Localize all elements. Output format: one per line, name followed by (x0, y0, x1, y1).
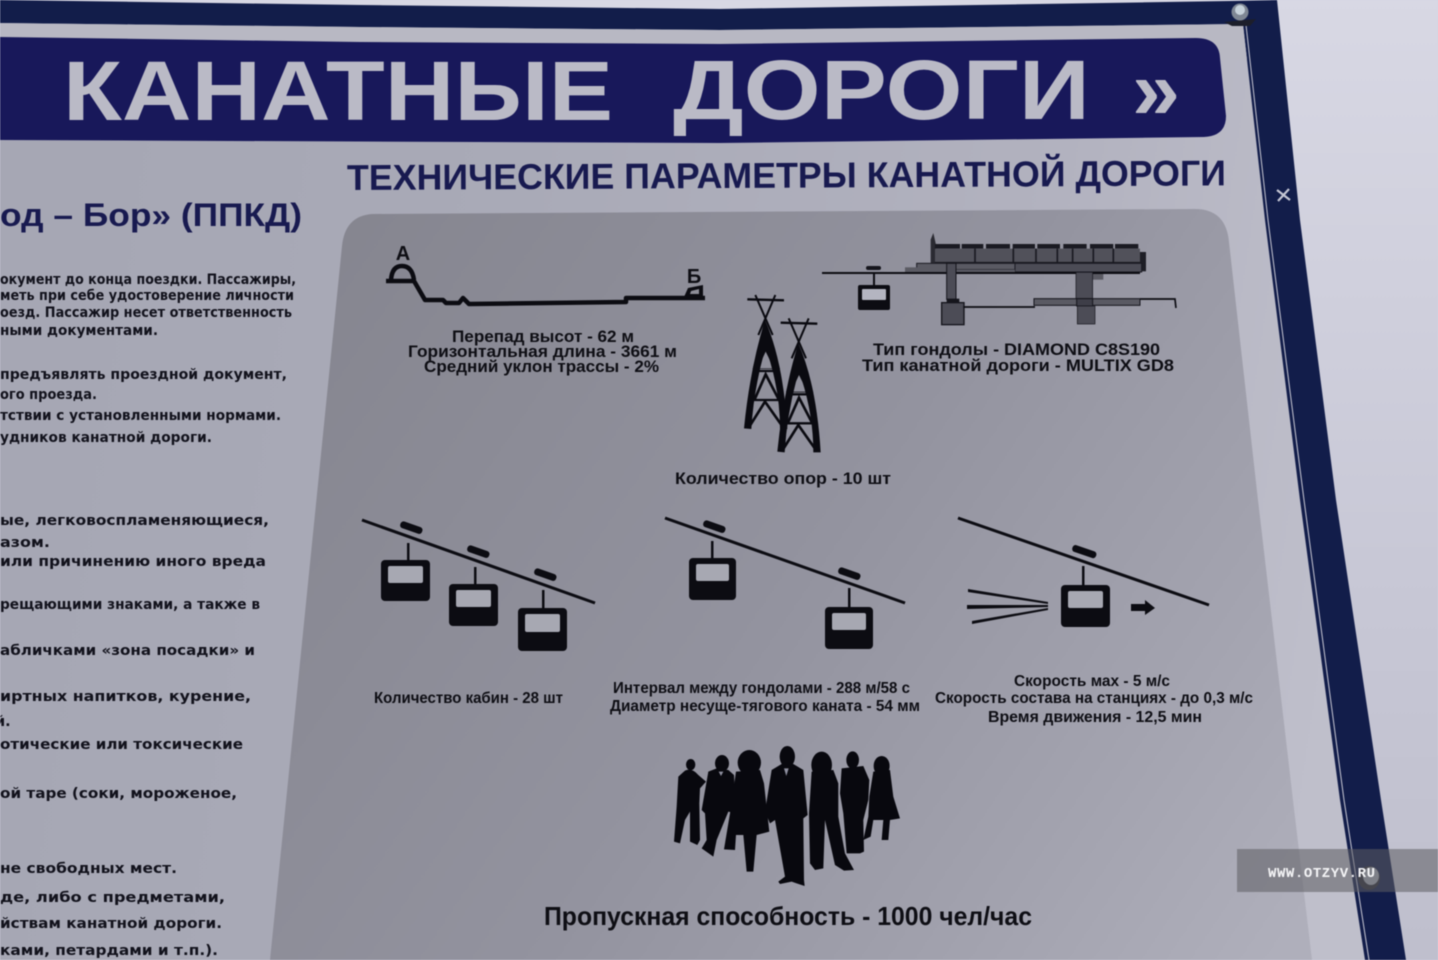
left column rules text: предъявлять проездной документ, (0, 367, 287, 383)
text: route parameters: Перепад высот - 62 м (452, 328, 634, 346)
text: interval and rope diameter: Диаметр несуще-тягового каната - 54 мм (610, 698, 920, 715)
text: route parameters: Средний уклон трассы - 2% (424, 358, 659, 376)
left column rules text (0, 272, 296, 959)
title text: » (1132, 43, 1180, 137)
left column rules text: или причинению иного вреда (0, 554, 266, 570)
light strip above banner (0, 23, 1247, 60)
watermark text: WWW.OTZYV.RU (1268, 866, 1375, 882)
left column rules text: де, либо с предметами, (0, 890, 225, 906)
left column rules text: ого проезда. (0, 387, 97, 403)
text: speed parameters: Скорость состава на станциях - до 0,3 м/с (935, 690, 1253, 707)
left column rules text: рещающими знаками, а также в (0, 597, 260, 613)
text: speed parameters: Время движения - 12,5 мин (988, 709, 1202, 726)
left column rules text: йствам канатной дороги. (0, 916, 222, 932)
left column rules text: ками, петардами и т.п.). (0, 943, 218, 959)
icon: towers (744, 295, 821, 452)
text: tower count: Количество опор - 10 шт (675, 469, 891, 488)
panel: technical parameters (270, 209, 1312, 960)
text: gondola type (862, 341, 1174, 375)
text: interval and rope diameter (610, 680, 920, 715)
icon: group of people (674, 746, 900, 886)
icon: frame bolt bottom (1358, 866, 1380, 890)
left column rules text: не свободных мест. (0, 861, 177, 877)
icon: route profile A to B: А (396, 243, 410, 265)
title text (63, 43, 1180, 138)
text: capacity: Пропускная способность - 1000 чел/час (544, 901, 1032, 931)
left column rules text: абличками «зона посадки» и (0, 643, 255, 659)
text: interval and rope diameter: Интервал между гондолами - 288 м/58 с (613, 680, 910, 697)
title text: КАНАТНЫЕ (63, 44, 613, 138)
icon: station with gondola (822, 233, 1176, 325)
text: speed parameters: Скорость мах - 5 м/с (1014, 673, 1170, 690)
watermark band (1237, 849, 1438, 892)
title text: ДОРОГИ (673, 43, 1090, 137)
icon: route profile A to B: Б (687, 266, 701, 288)
icon: frame bolt top (1224, 4, 1256, 26)
icon: white cross mark on frame (1277, 189, 1290, 201)
left column rules text: ой таре (соки, мороженое, (0, 786, 237, 802)
left column rules text: ными документами. (0, 323, 158, 339)
left column rules text: удников канатной дороги. (0, 430, 212, 446)
text: gondola type: Тип гондолы - DIAMOND C8S190 (873, 341, 1160, 359)
left column rules text: оезд. Пассажир несет ответственность (0, 305, 292, 321)
left column rules text: иртных напитков, курение, (0, 689, 251, 705)
left column rules text: отические или токсические (0, 737, 243, 753)
frame highlight line (1246, 25, 1369, 960)
heading: left column: од – Бор» (ППКД) (0, 197, 302, 233)
left column rules text: ые, легковоспламеняющиеся, (0, 513, 269, 529)
text: route parameters (408, 328, 677, 376)
left column rules text: азом. (0, 535, 50, 551)
left column rules text: окумент до конца поездки. Пассажиры, (0, 272, 296, 288)
icon: three gondolas on rope (362, 520, 595, 651)
text: gondola type: Тип канатной дороги - MULTIX GD8 (862, 357, 1174, 375)
heading: technical parameters: ТЕХНИЧЕСКИЕ ПАРАМЕТРЫ КАНАТНОЙ ДОРОГИ (347, 151, 1226, 198)
left column rules text: меть при себе удостоверение личности (0, 288, 294, 304)
icon: gondola speed (958, 518, 1209, 627)
text: speed parameters (935, 673, 1253, 726)
text: route parameters: Горизонтальная длина - 3661 м (408, 343, 677, 361)
left column rules text: тствии с установленными нормами. (0, 408, 281, 424)
title banner (0, 37, 1226, 143)
text: cabin count: Количество кабин - 28 шт (374, 690, 563, 707)
icon: two gondolas interval (665, 518, 905, 649)
icon: route profile A to B (386, 243, 705, 304)
